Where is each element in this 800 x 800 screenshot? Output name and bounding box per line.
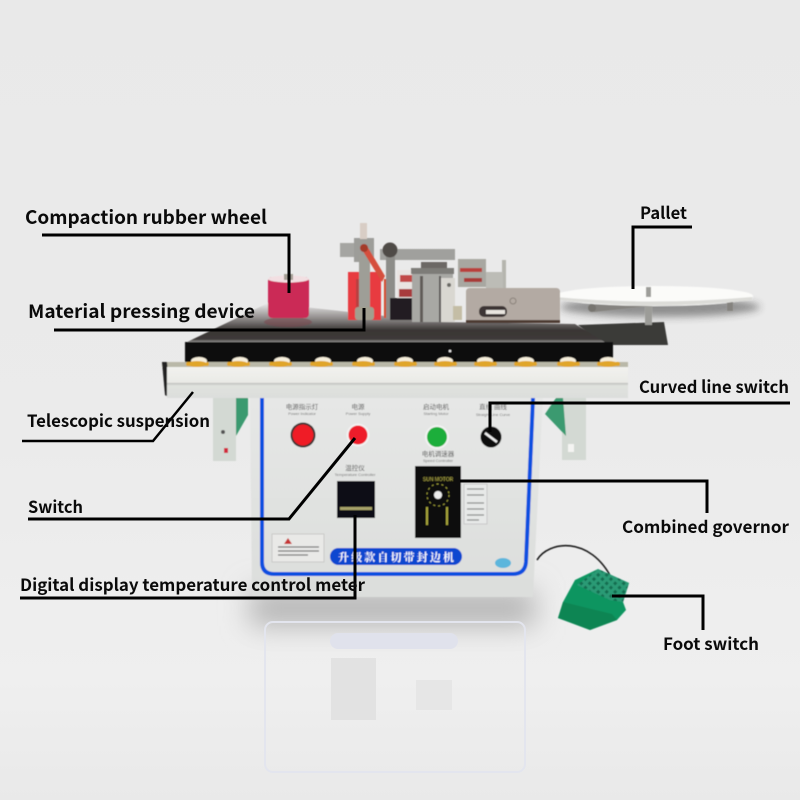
power indicator: Power Indicator (288, 411, 317, 416)
callout: switch: Switch (28, 494, 83, 518)
cover plate (466, 288, 560, 323)
foot pedal (537, 546, 629, 630)
mounting brackets (213, 398, 586, 461)
warning label (272, 534, 324, 562)
power supply button (346, 402, 370, 446)
power indicator (286, 402, 319, 448)
temperature controller (335, 463, 376, 518)
callout: switch (28, 438, 355, 519)
callout: telescopic suspension: Telescopic suspension (27, 407, 210, 432)
table top (185, 303, 613, 363)
temperature controller: Temperature Controller (335, 472, 376, 477)
power supply button: Power Supply (346, 411, 370, 416)
starting motor button: 启动电机 (423, 402, 450, 411)
callout: foot switch: Foot switch (663, 631, 759, 655)
starting motor button: Starting Motor (423, 411, 449, 416)
speed controller: Speed Controller (423, 458, 454, 463)
speed controller: 电机调速器 (422, 449, 455, 458)
knob and top guide mechanism (380, 242, 506, 322)
curved line rotary switch (476, 402, 511, 448)
starting motor button (423, 402, 450, 449)
speed controller (415, 449, 461, 538)
panel border (262, 398, 533, 574)
rail rollers (186, 357, 620, 367)
callout: compaction rubber wheel: Compaction rubber wheel (25, 203, 267, 230)
callout: digital display temperature control meter (20, 515, 366, 598)
callout: combined governor: Combined governor (622, 513, 790, 538)
material pressing device (340, 223, 389, 320)
floor shadow and reflection (250, 590, 535, 772)
callout: foot switch (612, 596, 759, 655)
callout: telescopic suspension (22, 392, 210, 441)
speed controller: SUN MOTOR (423, 477, 454, 483)
power indicator: 电源指示灯 (286, 402, 319, 411)
curved line rotary switch: Straight Line Curve (476, 412, 511, 417)
callout: material pressing device (28, 298, 364, 330)
speed instruction note (464, 484, 487, 524)
callout: material pressing device: Material pressing device (28, 298, 255, 324)
pallet disc with stand (555, 286, 760, 345)
temperature controller: 温控仪 (345, 463, 365, 472)
callout: pallet: Pallet (640, 200, 687, 224)
control panel (262, 398, 533, 574)
callout: pallet (633, 200, 692, 289)
model name banner: 升级款自切带封边机 (338, 549, 454, 565)
telescopic rail (162, 357, 628, 398)
callout: curved line switch (490, 373, 790, 432)
power supply button: 电源 (352, 402, 365, 411)
callout: digital display temperature control meter: Digital display temperature control meter (20, 571, 366, 596)
callout: compaction rubber wheel (25, 203, 289, 293)
callout: curved line switch: Curved line switch (639, 373, 789, 398)
logo sticker (495, 558, 511, 568)
cabinet (250, 395, 543, 597)
callout: combined governor (460, 481, 790, 538)
compaction rubber wheel (264, 274, 312, 327)
curved line rotary switch: 直线 曲线 (479, 402, 507, 411)
machine (162, 223, 760, 630)
